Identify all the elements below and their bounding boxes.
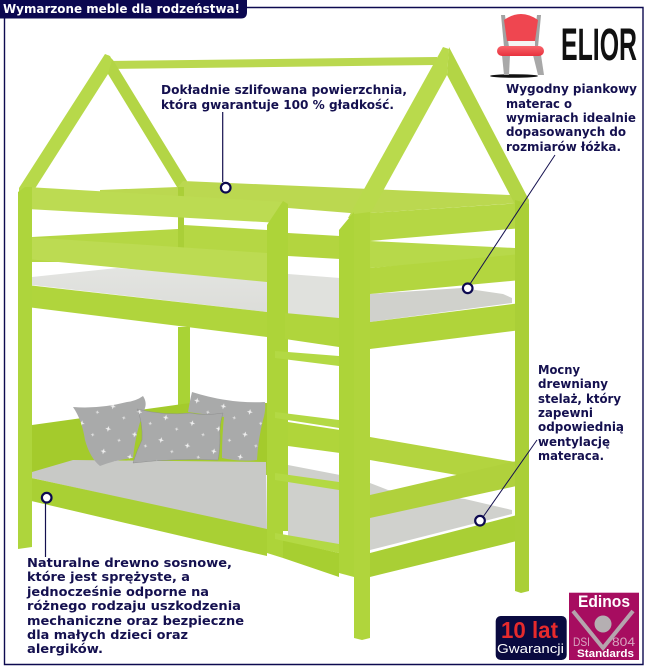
back left post bbox=[178, 327, 190, 412]
callout: pine wood: dla małych dzieci oraz bbox=[27, 628, 188, 642]
callout: mattress: wymiarach idealnie bbox=[506, 111, 636, 125]
callout: slatted frame: zapewni bbox=[538, 406, 593, 420]
callout: pine wood: alergików. bbox=[27, 642, 103, 656]
callout: slatted frame: odpowiednią bbox=[538, 420, 624, 434]
back second rail bbox=[184, 225, 267, 254]
badge: 10 lat gwarancji: Gwarancji bbox=[497, 642, 564, 656]
callout: smooth surface: która gwarantuje 100 % gładkość. bbox=[161, 98, 394, 112]
callout: slatted frame: stelaż, który bbox=[538, 392, 621, 406]
callout: mattress bbox=[463, 82, 637, 293]
callout: pine wood: Naturalne drewno sosnowe, bbox=[27, 556, 232, 570]
callout: pine wood: różnego rodzaju uszkodzenia bbox=[27, 599, 241, 613]
badge: Edinos standards bbox=[569, 593, 639, 660]
callout: smooth surface bbox=[161, 83, 407, 192]
left head panel upper bbox=[32, 229, 190, 262]
callout: mattress: Wygodny piankowy bbox=[506, 82, 637, 96]
ladder rungs bbox=[275, 351, 339, 553]
callout: slatted frame: materaca. bbox=[538, 449, 604, 463]
icon: chair bbox=[490, 14, 544, 78]
pillows bbox=[73, 392, 265, 466]
badge: Edinos standards: 804 bbox=[612, 637, 636, 649]
badge: Edinos standards: Edinos bbox=[578, 593, 630, 611]
callout: pine wood: mechaniczne oraz bezpieczne bbox=[27, 614, 244, 628]
callout: slatted frame bbox=[475, 363, 624, 526]
title banner: Wymarzone meble dla rodzeństwa! bbox=[3, 1, 240, 16]
back top rail bbox=[100, 181, 521, 215]
badge: Edinos standards: Standards bbox=[577, 648, 634, 660]
lower back rails bbox=[288, 422, 515, 485]
callout: mattress: dopasowanych do bbox=[506, 125, 626, 139]
posts bbox=[18, 187, 529, 640]
lower front rails bbox=[27, 460, 521, 577]
ladder base bbox=[283, 540, 339, 577]
callout: mattress: rozmiarów łóżka. bbox=[506, 140, 621, 154]
ridge beam bbox=[106, 57, 437, 69]
lower mattress bbox=[32, 460, 512, 553]
badge: 10 lat gwarancji: 10 lat bbox=[501, 617, 558, 643]
badge: Edinos standards: DSI bbox=[573, 637, 590, 649]
callout: smooth surface: Dokładnie szlifowana powierzchnia, bbox=[161, 83, 407, 97]
callout: mattress: materac o bbox=[506, 97, 572, 111]
callout: slatted frame: wentylację bbox=[538, 435, 610, 449]
back upper post bbox=[178, 187, 184, 252]
upper front rails right bbox=[370, 203, 522, 349]
callout: pine wood bbox=[26, 493, 244, 656]
badge: 10 lat gwarancji bbox=[496, 616, 567, 660]
left roof gable bbox=[19, 54, 187, 194]
left head panel lower bbox=[32, 403, 268, 475]
callout: pine wood: jednocześnie odporne na bbox=[26, 585, 209, 599]
bunk bed illustration bbox=[18, 47, 529, 640]
logo: Elior chair bbox=[490, 14, 637, 78]
ladder top rail bbox=[285, 313, 339, 347]
upper front rails left bbox=[27, 187, 285, 337]
callout: slatted frame: drewniany bbox=[538, 377, 608, 391]
callout: pine wood: które jest sprężyste, a bbox=[27, 570, 190, 584]
upper mattress bbox=[32, 268, 512, 322]
callout: slatted frame: Mocny bbox=[538, 363, 580, 377]
right roof gable bbox=[348, 47, 529, 218]
